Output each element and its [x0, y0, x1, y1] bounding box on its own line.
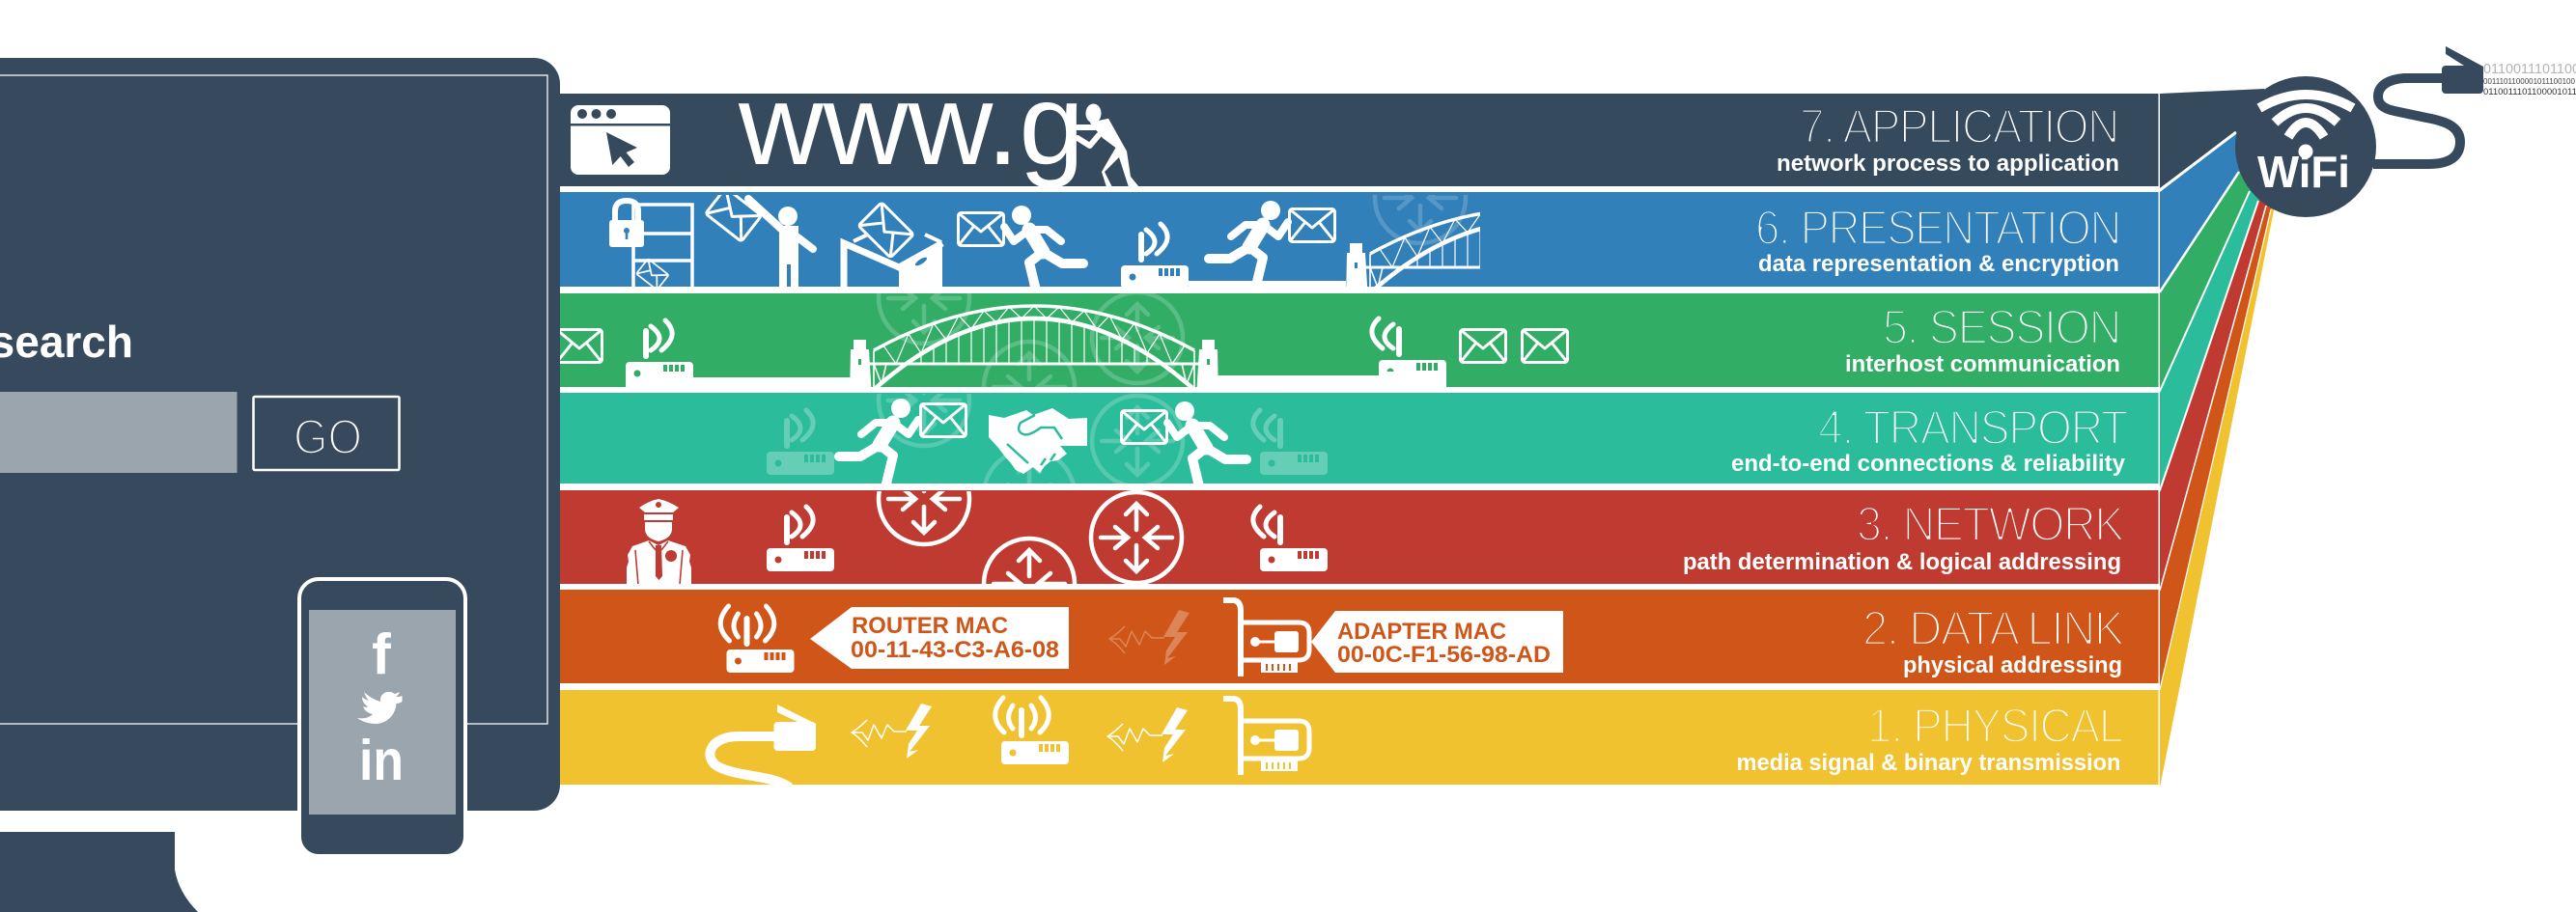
icon: guard	[627, 499, 691, 585]
icon: linkedin: in	[359, 729, 404, 792]
ethernet cable	[2373, 78, 2460, 164]
ghost wifi router	[767, 410, 834, 475]
icon: wifi arcs	[2259, 95, 2353, 137]
layer description: path determination & logical addressing	[1683, 549, 2121, 575]
callout: router mac: ROUTER MAC	[852, 613, 1008, 639]
icon: runner carrying envelope	[839, 399, 966, 484]
icon: wifi router	[767, 507, 834, 571]
icon: runner carrying envelope	[1209, 201, 1334, 286]
layer title: 3. NETWORK	[1857, 497, 2124, 551]
layer description: end-to-end connections & reliability	[1731, 451, 2126, 477]
panel: layer 2 data link	[560, 590, 2159, 683]
icon: wifi router	[1253, 507, 1328, 571]
panel: layer 4 transport	[560, 393, 2159, 484]
icon: partial bridge	[1346, 212, 1480, 287]
layer title: 1. PHYSICAL	[1867, 699, 2123, 753]
icon: figure pushing letter	[1078, 104, 1139, 187]
icon: wifi router	[1372, 318, 1446, 387]
layer title: 6. PRESENTATION	[1755, 201, 2120, 255]
panel: layer 3 network	[560, 490, 2159, 584]
panel: layer 5 session	[560, 293, 2159, 387]
ghost router	[1373, 195, 1468, 245]
phone body	[299, 579, 465, 856]
icon: wifi router	[1121, 224, 1189, 289]
icon: runner carrying envelope	[1122, 401, 1246, 486]
binary data stream: 0110011101100001011	[2483, 87, 2576, 97]
icon: runner carrying envelope	[958, 206, 1083, 290]
icon: browser window	[571, 105, 670, 175]
icon: signal bolt	[1107, 707, 1188, 762]
GO button	[253, 397, 400, 470]
ghost routers	[877, 293, 1186, 387]
phone with social icons	[299, 579, 465, 856]
bridge deck	[1189, 281, 1346, 287]
icon: twitter bird	[357, 692, 402, 724]
wifi label: WiFi	[2257, 147, 2350, 197]
layer title: 7. APPLICATION	[1800, 99, 2118, 153]
icon: facebook: f	[372, 622, 391, 686]
funnel wedges converging on wifi	[2160, 89, 2306, 788]
layer title: 5. SESSION	[1883, 300, 2120, 354]
icon: bridge	[850, 306, 1218, 398]
callout: adapter mac: 00-0C-F1-56-98-AD	[1337, 642, 1551, 668]
callout: router mac: 00-11-43-C3-A6-08	[851, 637, 1059, 663]
icon: network router	[981, 537, 1078, 584]
icon: person holding envelope	[706, 188, 813, 288]
icon: envelope	[556, 330, 602, 363]
ghost signal icon	[1109, 610, 1190, 665]
search input box	[0, 392, 238, 473]
ghost wifi router	[1253, 410, 1328, 475]
binary data stream: 0011101100001011100100	[2483, 77, 2575, 86]
layer description: physical addressing	[1903, 652, 2122, 678]
icon: locked shelf	[609, 201, 692, 290]
url text: www.g	[738, 61, 1084, 189]
monitor screen outline	[0, 75, 547, 724]
layer description: interhost communication	[1845, 351, 2120, 377]
icon: wifi router	[720, 606, 794, 673]
layer title: 2. DATA LINK	[1862, 601, 2124, 655]
monitor body	[0, 58, 560, 811]
icon: signal bolt	[852, 704, 932, 759]
callout: adapter mac: ADAPTER MAC	[1337, 619, 1506, 645]
binary data stream	[2483, 61, 2576, 97]
icon: handshake	[989, 408, 1087, 474]
icon: wifi router	[995, 698, 1069, 764]
icon: network card	[1223, 600, 1309, 677]
icon: network card	[1223, 699, 1309, 775]
wifi badge	[2235, 76, 2376, 217]
bridge deck right	[1217, 375, 1381, 387]
icon: ballot box	[844, 201, 942, 287]
panel: layer 1 physical	[560, 690, 2159, 788]
icon: envelope	[1522, 330, 1568, 363]
icon: network router	[877, 491, 971, 546]
icon: network router	[1091, 492, 1182, 583]
GO button: GO	[294, 409, 362, 464]
layer description: media signal & binary transmission	[1736, 750, 2120, 776]
icon: envelope	[1460, 330, 1506, 363]
icon: ethernet plug and cable	[710, 705, 816, 788]
callout: adapter mac	[1311, 611, 1563, 673]
layer description: network process to application	[1777, 151, 2119, 177]
panel: layer 7 application	[560, 94, 2159, 186]
icon: wifi dot	[2298, 145, 2313, 158]
layer title: 4. TRANSPORT	[1818, 401, 2128, 455]
panel: layer 6 presentation	[560, 192, 2159, 287]
phone screen	[309, 610, 456, 815]
icon: ethernet plug	[2442, 46, 2483, 94]
ghost routers	[877, 394, 1186, 484]
callout: router mac	[810, 607, 1069, 669]
monitor	[0, 58, 560, 912]
icon: wifi router	[626, 320, 693, 387]
layer description: data representation & encryption	[1758, 251, 2119, 277]
bridge deck left	[692, 377, 852, 387]
monitor stand	[0, 832, 198, 912]
